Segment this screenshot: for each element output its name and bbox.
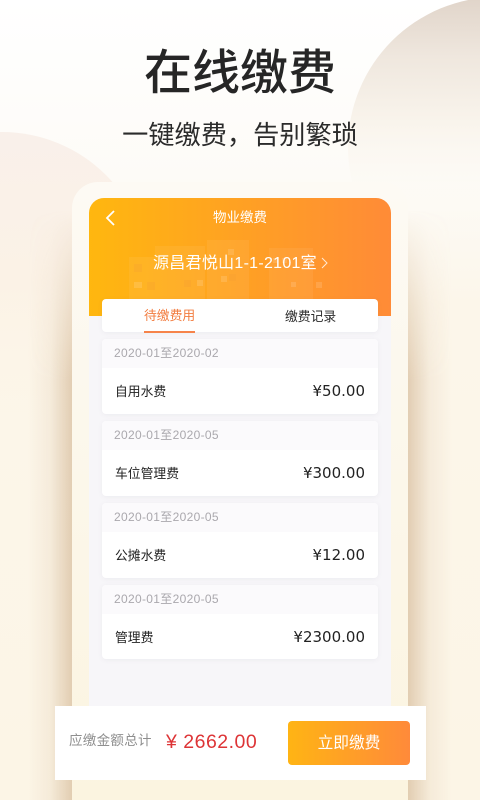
fee card 1: 自用水费 (115, 384, 166, 399)
subtitle: 一键缴费，告别繁琐 (122, 120, 358, 150)
icon: address chevron (322, 258, 328, 268)
fee card 1 (102, 339, 378, 414)
fee card 4: 2020-01至2020-05 (114, 592, 219, 606)
fee card 3 (102, 503, 378, 578)
building silhouettes (129, 240, 322, 299)
total label: 应缴金额总计 (69, 733, 152, 748)
fee card 2: 2020-01至2020-05 (114, 428, 219, 442)
pay button: 立即缴费 (318, 735, 380, 752)
fee card 1: ¥50.00 (312, 382, 365, 400)
fee card 2 (102, 421, 378, 496)
phone screen (89, 198, 391, 718)
payment bar (55, 706, 426, 780)
title: 在线缴费 (144, 47, 336, 100)
fee card 2: ¥300.00 (303, 464, 365, 482)
active tab: 待缴费用 (144, 308, 195, 323)
inactive tab: 缴费记录 (285, 309, 336, 324)
left phone shadow (41, 236, 72, 800)
pay button (288, 721, 410, 765)
fee card 4 (102, 585, 378, 659)
address selector: 源昌君悦山1-1-2101室 (153, 255, 317, 272)
header band (89, 198, 391, 316)
screen title: 物业缴费 (213, 210, 267, 225)
fee card 4: 管理费 (115, 630, 153, 645)
fee card 4: ¥2300.00 (293, 628, 365, 646)
fee card 3: 公摊水费 (115, 548, 166, 563)
phone frame (72, 182, 408, 800)
fee card 2: 车位管理费 (115, 466, 179, 481)
icon: back arrow (106, 210, 115, 226)
right phone shadow (408, 233, 439, 800)
fee card 3: 2020-01至2020-05 (114, 510, 219, 524)
tab bar (102, 299, 378, 332)
total amount: ¥ 2662.00 (166, 731, 257, 753)
fee card 1: 2020-01至2020-02 (114, 346, 219, 360)
fee card 3: ¥12.00 (312, 546, 365, 564)
